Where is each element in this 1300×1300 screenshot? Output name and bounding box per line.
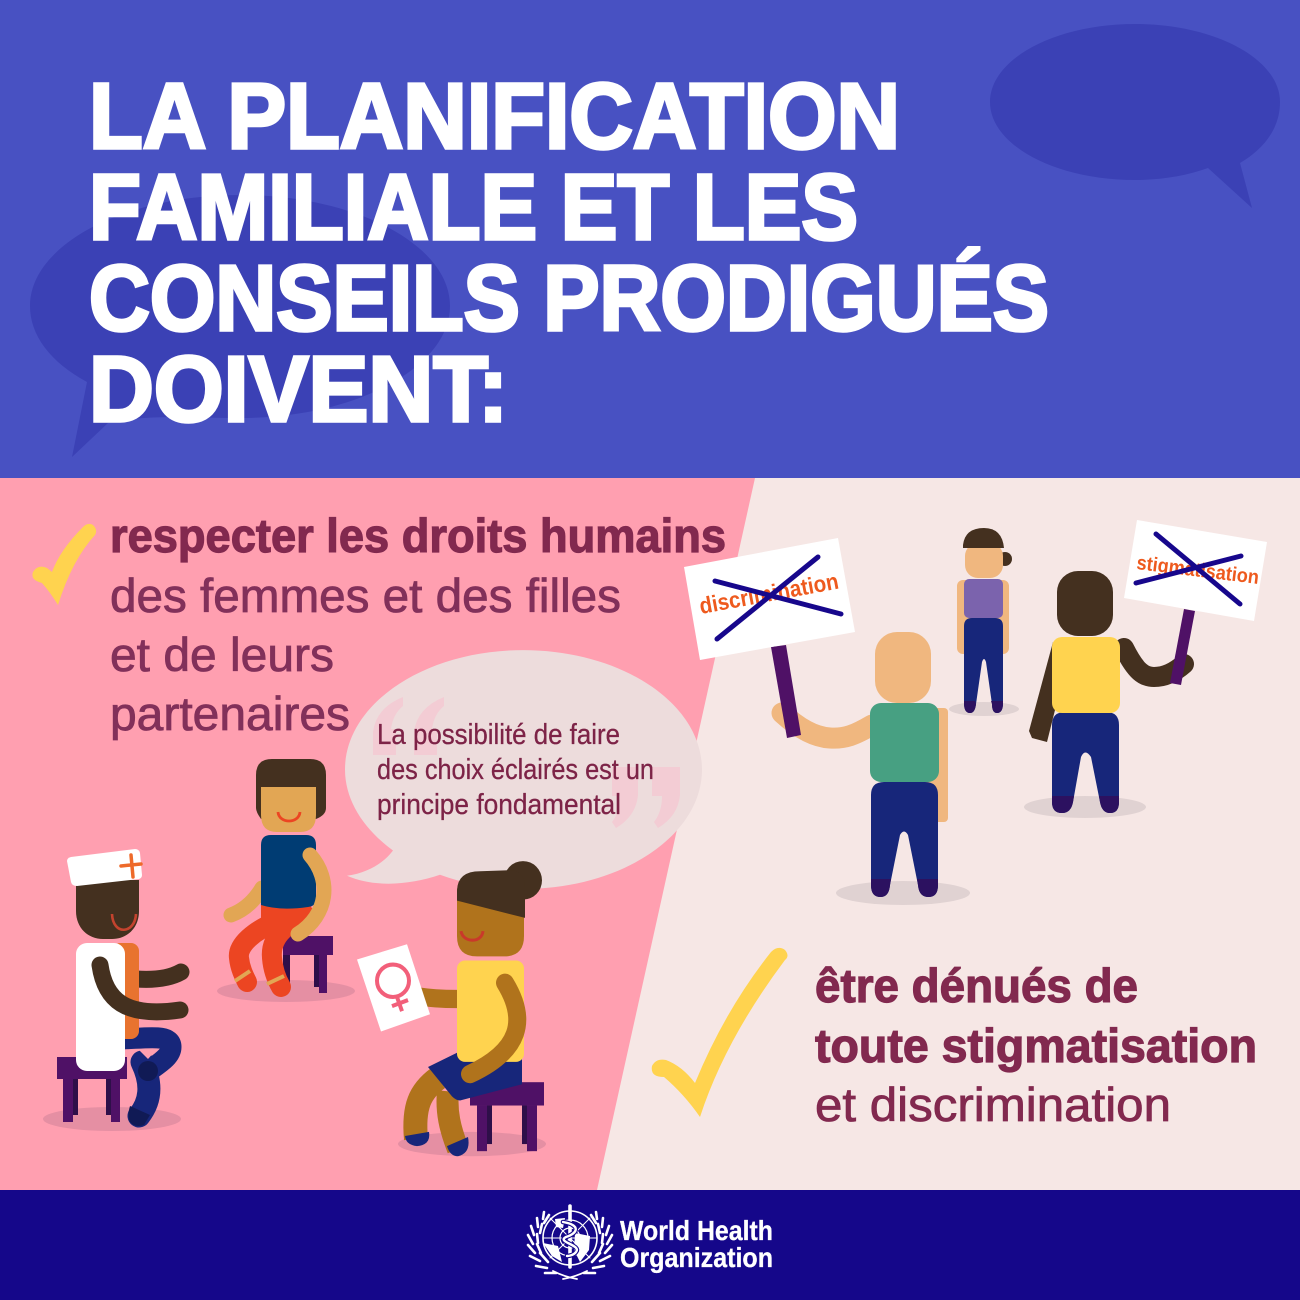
text block: stigma: être dénués de: [815, 959, 1138, 1012]
title: [89, 64, 1049, 441]
WHO logo text: Organization: [620, 1242, 773, 1273]
quote text: des choix éclairés est un: [377, 754, 654, 786]
sign: stigmatisation: stigmatisation: [1135, 552, 1260, 589]
check mark: large: [652, 948, 788, 1117]
figure: middle person standing: [949, 528, 1019, 716]
header panel: [0, 0, 1300, 479]
sign: discrimination: [684, 538, 855, 660]
figure: person with yellow top and sign: [1024, 520, 1267, 818]
figure: woman with card: [357, 861, 546, 1156]
text block: stigma: [815, 959, 1257, 1131]
check mark: small: [32, 524, 96, 605]
text block: human rights: [110, 509, 726, 740]
figure: person with green top and sign: [684, 538, 970, 905]
figure: seated patient: [217, 759, 355, 1002]
text block: human rights: respecter les droits humains: [110, 509, 726, 562]
WHO logo text: [620, 1215, 773, 1273]
speech bubble: quote: [345, 650, 702, 889]
speech bubble decoration: top right: [990, 24, 1280, 208]
opening quote mark: [373, 697, 444, 755]
sign: discrimination: discrimination: [697, 568, 841, 619]
panel: pink left: [0, 478, 760, 1190]
quote text: La possibilité de faire: [377, 719, 620, 751]
text block: human rights: et de leurs: [110, 628, 334, 681]
title: DOIVENT:: [89, 337, 508, 441]
sign stick: [771, 645, 801, 738]
sign: stigmatisation: [1124, 520, 1267, 621]
text block: human rights: des femmes et des filles: [110, 569, 621, 622]
title: CONSEILS PRODIGUÉS: [89, 246, 1049, 350]
title: FAMILIALE ET LES: [89, 155, 858, 259]
footer band: [0, 1190, 1300, 1300]
figure: nurse: [43, 849, 181, 1131]
card with female symbol: [357, 944, 430, 1031]
closing quote mark: [612, 767, 680, 828]
text block: stigma: toute stigmatisation: [815, 1019, 1257, 1072]
quote text: [377, 719, 654, 821]
speech bubble decoration: left: [30, 195, 450, 457]
text block: human rights: partenaires: [110, 687, 350, 740]
title: LA PLANIFICATION: [89, 64, 900, 168]
panel: beige right: [597, 478, 1300, 1190]
WHO logo emblem: [528, 1206, 612, 1279]
sign stick: [1170, 609, 1195, 685]
nurse hat: [67, 849, 142, 886]
WHO logo text: World Health: [620, 1215, 773, 1246]
text block: stigma: et discrimination: [815, 1078, 1171, 1131]
quote text: principe fondamental: [377, 789, 621, 821]
